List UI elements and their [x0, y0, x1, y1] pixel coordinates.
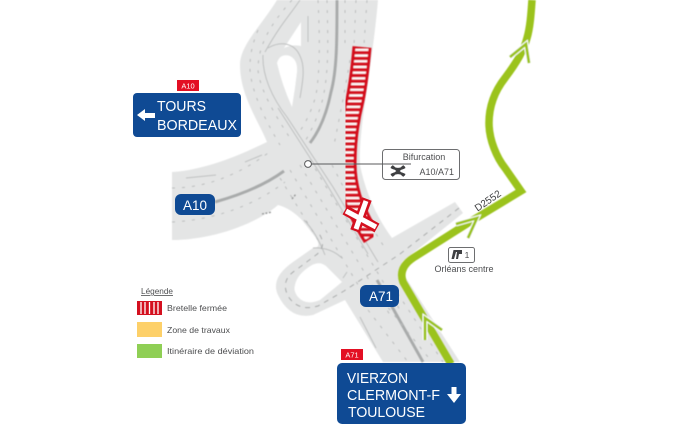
road network — [172, 0, 463, 362]
label: Orléans centre: Orléans centre — [434, 264, 494, 274]
badge: A10: A10 — [183, 198, 207, 213]
sign: Vierzon Clermont-F Toulouse: CLERMONT-F — [347, 387, 440, 404]
closure cross — [345, 199, 377, 231]
sign: Tours Bordeaux: TOURS — [157, 98, 206, 115]
legend item: closed slip road: Bretelle fermée — [167, 303, 227, 313]
dashed lane lines — [172, 0, 443, 362]
callout: bifurcation A10/A71: A10/A71 — [419, 167, 454, 177]
icon: interchange — [391, 166, 405, 176]
closed slip road — [347, 47, 372, 238]
badge: A71: A71 — [369, 289, 393, 304]
medians — [310, 0, 337, 143]
road tag: A71: A71 — [345, 350, 359, 360]
badge: A71 — [360, 285, 399, 307]
sign: Tours Bordeaux: BORDEAUX — [157, 117, 237, 134]
diversion route — [402, 0, 532, 364]
label: D2552: D2552 — [473, 188, 504, 214]
solid lane lines — [186, 0, 378, 348]
icon: exit — [452, 250, 462, 259]
sign: Vierzon Clermont-F Toulouse: TOULOUSE — [348, 404, 425, 421]
legend item: diversion route: Itinéraire de déviation — [167, 346, 254, 356]
road tag: A10 — [177, 80, 199, 91]
callout: bifurcation A10/A71: Bifurcation — [403, 152, 445, 162]
icon: down arrow — [447, 387, 461, 403]
sign: Vierzon Clermont-F Toulouse — [337, 363, 466, 424]
road tag: A10: A10 — [181, 82, 195, 90]
legend — [137, 287, 254, 358]
callout: bifurcation A10/A71 — [305, 150, 460, 180]
arrowhead: middle — [456, 218, 477, 238]
badge: A10 — [175, 194, 215, 215]
arrowhead: top — [510, 44, 529, 63]
arrowhead: bottom — [425, 318, 442, 340]
road tag: A71 — [341, 349, 363, 360]
exit marker: 1 — [465, 250, 470, 260]
icon: left arrow — [137, 109, 155, 121]
legend title: Légende — [141, 287, 174, 296]
sign: Vierzon Clermont-F Toulouse: VIERZON — [347, 370, 408, 387]
exit marker — [448, 248, 474, 262]
legend item: work zone: Zone de travaux — [167, 325, 231, 335]
sign: Tours Bordeaux — [133, 93, 241, 137]
